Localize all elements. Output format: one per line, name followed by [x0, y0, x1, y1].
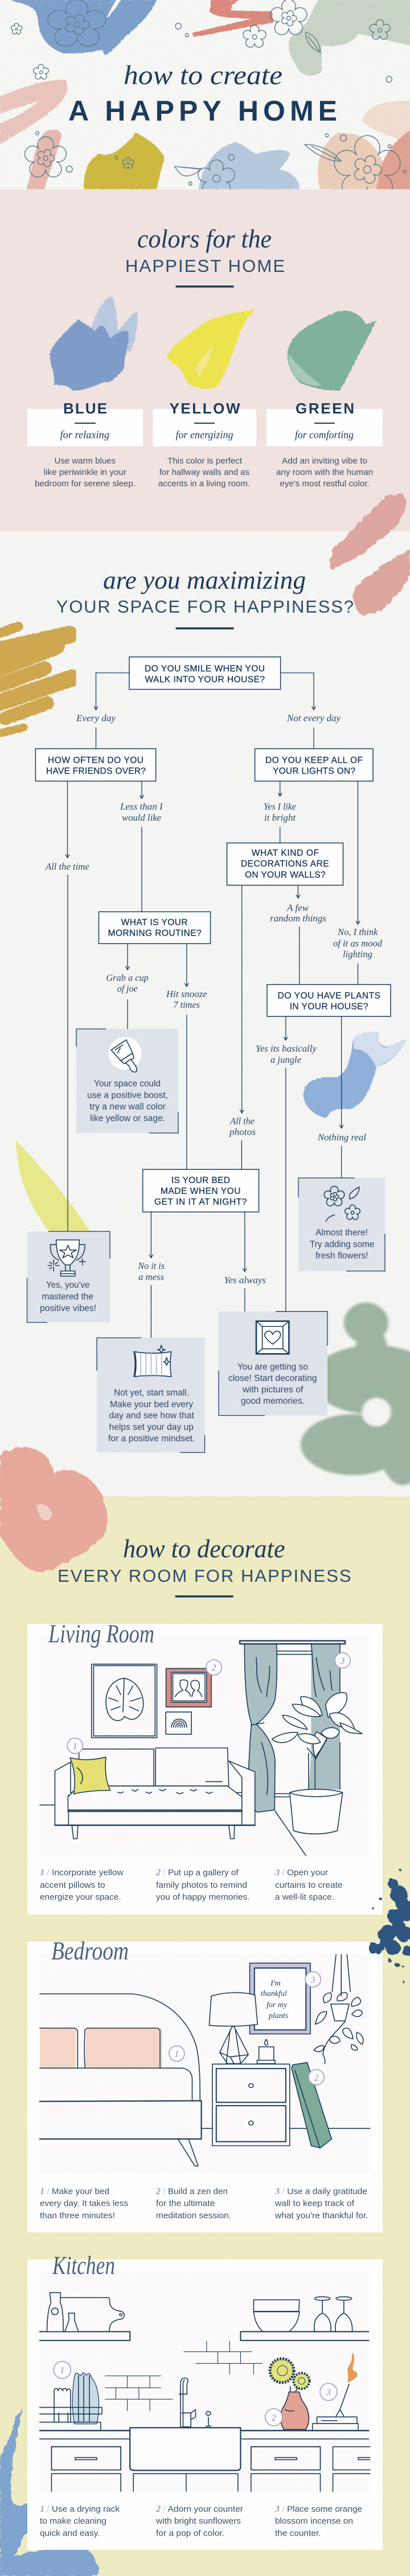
title: how to create	[124, 60, 282, 90]
answer labels: photos	[229, 1127, 256, 1138]
panel: blue card	[27, 400, 143, 446]
icon: yellow paint swatch	[167, 309, 256, 389]
question: friends over: HAVE FRIENDS OVER?	[46, 766, 146, 776]
handwritten title: living room: Living Room	[48, 1619, 154, 1648]
result: not yet: for a positive mindset.	[108, 1434, 195, 1444]
green watercolor blot	[301, 1303, 410, 1485]
caption: kitchen 1: to make cleaning	[40, 2516, 106, 2526]
caption: bedroom 1: than three minutes!	[40, 2211, 115, 2221]
result: so close	[219, 1312, 327, 1416]
panel: blue card: BLUE	[63, 400, 107, 417]
frame lettering: thankful	[261, 1990, 287, 1998]
answer labels	[45, 713, 383, 1285]
panel: pink section brush top right	[330, 493, 410, 615]
question: plants: IN YOUR HOUSE?	[290, 1002, 368, 1012]
result: almost there: Almost there!	[315, 1228, 368, 1238]
result: so close: good memories.	[241, 1396, 305, 1406]
caption: living room 3: curtains to create	[275, 1880, 343, 1890]
answer labels: No, I think	[337, 927, 378, 937]
answer labels: would like	[122, 812, 161, 823]
question: decorations: DECORATIONS ARE	[241, 859, 329, 869]
caption: living room 2: 2 / Put up a gallery of	[155, 1868, 239, 1878]
flowchart connectors	[65, 673, 360, 1338]
result: not yet: helps set your day up	[109, 1423, 194, 1432]
text block: blue description: bedroom for serene sleep.	[35, 479, 136, 489]
icon: green paint swatch	[288, 311, 376, 391]
text block: green description: Add an inviting vibe to	[282, 456, 367, 466]
caption: living room 2	[155, 1868, 249, 1902]
illustration: bedroom	[40, 1954, 370, 2166]
number badges: 2	[212, 1663, 216, 1673]
question: plants	[267, 985, 391, 1016]
result: positive boost	[76, 1029, 178, 1133]
icon: picture frame with heart	[256, 1321, 289, 1354]
panel: green card	[266, 400, 383, 446]
title: A HAPPY HOME	[68, 95, 337, 127]
result: so close: You are getting so	[237, 1362, 308, 1372]
caption: living room 3: 3 / Open your	[274, 1868, 328, 1878]
hero small circles and leaves	[36, 23, 407, 185]
handwritten title: bedroom: Bedroom	[51, 1936, 129, 1965]
heading: are you maximizing	[56, 565, 354, 629]
result: almost there: Try adding some	[310, 1240, 375, 1249]
result: positive boost: use a positive boost,	[87, 1091, 168, 1101]
result: not yet: Not yet, start small.	[114, 1388, 189, 1398]
number badges: 3	[339, 1656, 345, 1666]
caption: kitchen 1: 1 / Use a drying rack	[40, 2504, 120, 2514]
ink splatter	[368, 1869, 410, 1982]
caption: bedroom 3: 3 / Use a daily gratitude	[274, 2186, 367, 2197]
text block: yellow description	[158, 456, 250, 489]
result: not yet: day and see how that	[109, 1411, 194, 1421]
answer labels: of it as mood	[333, 938, 383, 949]
question: do you smile: WALK INTO YOUR HOUSE?	[145, 675, 265, 685]
caption: bedroom 3: wall to keep track of	[274, 2199, 355, 2208]
heading: colors for the happiest home: colors for the	[137, 224, 272, 253]
answer labels: 7 times	[173, 999, 200, 1010]
question: decorations: ON YOUR WALLS?	[245, 870, 326, 880]
question: plants: DO YOU HAVE PLANTS	[278, 991, 380, 1001]
caption: living room 3	[274, 1868, 343, 1902]
heading: are you maximizing: YOUR SPACE FOR HAPPINESS?	[56, 597, 354, 617]
caption: kitchen 2	[155, 2504, 243, 2538]
panel: yellow card	[153, 400, 256, 446]
result: not yet: Make your bed every	[110, 1400, 193, 1409]
frame lettering	[261, 1979, 289, 2020]
question: lights on	[255, 749, 373, 781]
answer labels: Yes I like	[264, 801, 296, 812]
number badges	[169, 1971, 324, 2085]
answer labels: No it is	[137, 1260, 165, 1271]
answer labels: a mess	[138, 1272, 164, 1283]
panel: green card: for comforting	[295, 429, 354, 441]
text block: yellow description: for hallway walls and as	[159, 468, 249, 477]
yellow section background	[0, 1496, 410, 2576]
text block: blue description	[35, 456, 136, 489]
hero section background	[0, 0, 410, 189]
answer labels: Less than I	[120, 801, 163, 812]
heading: how to decorate: how to decorate	[123, 1534, 285, 1563]
heading: how to decorate: EVERY ROOM FOR HAPPINESS	[58, 1566, 351, 1586]
number badges: 1	[60, 2366, 64, 2375]
answer labels: Nothing real	[317, 1132, 366, 1143]
answer labels: of joe	[117, 983, 138, 994]
caption: living room 2: you of happy memories.	[156, 1892, 249, 1902]
caption: bedroom 3	[274, 2186, 368, 2221]
question: bed made: GET IN IT AT NIGHT?	[154, 1197, 247, 1207]
heading: colors for the happiest home	[125, 224, 285, 288]
answer labels: Every day	[76, 713, 116, 723]
question: decorations: WHAT KIND OF	[252, 849, 319, 858]
caption: living room 3: a well-lit space.	[275, 1892, 334, 1902]
answer labels: All the time	[45, 861, 89, 872]
caption: living room 1: energize your space.	[40, 1892, 121, 1902]
caption: kitchen 3	[274, 2504, 362, 2538]
text block: green description	[276, 456, 373, 489]
question: lights on: YOUR LIGHTS ON?	[273, 766, 355, 776]
text block: yellow description: This color is perfect	[167, 456, 243, 466]
flowchart section background	[0, 531, 410, 1496]
answer labels: A few	[286, 902, 309, 913]
icon: paint brush	[111, 1040, 137, 1072]
question: decorations	[227, 843, 343, 885]
panel: kitchen card	[27, 2251, 383, 2550]
result: positive boost: try a new wall color	[90, 1102, 166, 1112]
icon: flowers	[324, 1186, 360, 1222]
pink paint blob	[0, 1447, 107, 1573]
blue paint swirl	[304, 1032, 407, 1118]
result: mastered: mastered the	[42, 1292, 93, 1302]
caption: kitchen 3: 3 / Place some orange	[274, 2504, 362, 2514]
answer labels: Grab a cup	[106, 973, 149, 983]
answer labels: it bright	[264, 812, 296, 823]
result: not yet	[97, 1338, 205, 1453]
text block: blue description: Use warm blues	[55, 456, 116, 466]
result: mastered: Yes, you've	[46, 1280, 90, 1290]
gold scribble brush	[0, 626, 72, 733]
result: positive boost: like yellow or sage.	[90, 1114, 165, 1123]
question: morning routine: MORNING ROUTINE?	[108, 929, 202, 938]
caption: kitchen 1: quick and easy.	[40, 2529, 100, 2538]
caption: kitchen 2: for a pop of color.	[156, 2529, 224, 2538]
caption: kitchen 1	[40, 2504, 120, 2538]
number badges: 3	[326, 2388, 331, 2397]
text block: yellow description: accents in a living room.	[158, 479, 250, 489]
icon: blue paint swatch	[50, 296, 138, 391]
handwritten title: kitchen: Kitchen	[52, 2251, 115, 2280]
number badges: 1	[73, 1742, 77, 1751]
result: mastered: positive vibes!	[40, 1304, 96, 1313]
hero decoration: paint strokes and flowers	[0, 0, 410, 199]
caption: living room 1: accent pillows to	[40, 1880, 105, 1890]
caption: bedroom 2: 2 / Build a zen den	[155, 2186, 228, 2197]
answer labels: Yes its basically	[256, 1043, 317, 1054]
caption: bedroom 1: every day. It takes less	[40, 2199, 128, 2208]
caption: kitchen 3: blossom incense on	[275, 2516, 353, 2526]
number badges: 1	[174, 2049, 179, 2059]
heading: are you maximizing: are you maximizing	[103, 565, 306, 594]
caption: kitchen 2: 2 / Adorn your counter	[155, 2504, 243, 2514]
caption: bedroom 2	[155, 2186, 231, 2221]
question: do you smile	[129, 657, 281, 689]
caption: living room 1: 1 / Incorporate yellow	[40, 1868, 124, 1878]
number badges: 2	[314, 2073, 319, 2083]
caption: bedroom 1	[40, 2186, 128, 2221]
panel: yellow card: for energizing	[175, 429, 233, 441]
pink section background	[0, 189, 410, 531]
panel: bedroom card	[27, 1936, 383, 2232]
caption: bedroom 2: for the ultimate	[156, 2199, 215, 2208]
question: friends over	[35, 749, 156, 781]
answer labels: Hit snooze	[166, 989, 207, 999]
answer labels: Yes always	[224, 1275, 266, 1285]
text block: green description: eye's most restful color.	[280, 479, 369, 489]
panel: living room card	[27, 1619, 383, 1915]
caption: living room 1	[40, 1868, 124, 1902]
frame lettering: plants	[268, 2012, 289, 2020]
number badges	[67, 1653, 350, 1754]
question: morning routine	[99, 912, 211, 944]
result: positive boost: Your space could	[94, 1079, 161, 1089]
caption: living room 2: family photos to remind	[156, 1880, 247, 1890]
caption: bedroom 1: 1 / Make your bed	[40, 2186, 109, 2197]
result: almost there: fresh flowers!	[315, 1251, 368, 1260]
yellow paint stroke	[16, 1140, 90, 1231]
text block: blue description: like periwinkle in your	[44, 468, 126, 477]
caption: kitchen 3: the counter.	[275, 2529, 321, 2538]
result: so close: close! Start decorating	[228, 1374, 317, 1383]
panel: blue card: for relaxing	[60, 429, 109, 441]
heading: how to decorate	[58, 1534, 351, 1597]
icon: trophy	[48, 1240, 85, 1276]
result: so close: with pictures of	[242, 1385, 304, 1395]
question: do you smile: DO YOU SMILE WHEN YOU	[145, 664, 265, 673]
answer labels: All the	[229, 1115, 255, 1126]
frame lettering: for my	[266, 2001, 288, 2009]
number badges: 2	[272, 2413, 276, 2423]
heading: colors for the happiest home: HAPPIEST HOME	[125, 256, 285, 276]
result: almost there	[298, 1178, 385, 1271]
number badges	[54, 2362, 337, 2426]
illustration: living room	[40, 1641, 362, 1856]
panel: yellow card: YELLOW	[170, 400, 240, 417]
answer labels: lighting	[343, 949, 372, 960]
caption: bedroom 2: meditation session.	[156, 2211, 231, 2221]
caption: bedroom 3: what you're thankful for.	[274, 2211, 368, 2221]
question: bed made: MADE WHEN YOU	[161, 1186, 240, 1196]
icon: pillow	[134, 1345, 171, 1376]
answer labels: a jungle	[270, 1055, 301, 1065]
question: bed made: IS YOUR BED	[171, 1176, 230, 1185]
frame lettering: I'm	[270, 1979, 281, 1988]
caption: kitchen 2: with bright sunflowers	[155, 2516, 241, 2526]
illustration: kitchen	[40, 2293, 370, 2491]
title	[68, 60, 337, 127]
panel: green card: GREEN	[296, 400, 354, 417]
text block: green description: any room with the human	[276, 468, 373, 477]
question: morning routine: WHAT IS YOUR	[121, 917, 188, 927]
question: bed made	[143, 1169, 259, 1212]
result: mastered	[27, 1231, 110, 1322]
icon: sunflowers	[270, 2359, 310, 2389]
bottom-left blue paint behind kitchen card	[0, 2407, 99, 2576]
question: lights on: DO YOU KEEP ALL OF	[265, 755, 363, 765]
number badges: 3	[310, 1975, 315, 1985]
answer labels: Not every day	[286, 713, 341, 723]
answer labels: random things	[270, 913, 326, 924]
question: friends over: HOW OFTEN DO YOU	[48, 755, 144, 765]
